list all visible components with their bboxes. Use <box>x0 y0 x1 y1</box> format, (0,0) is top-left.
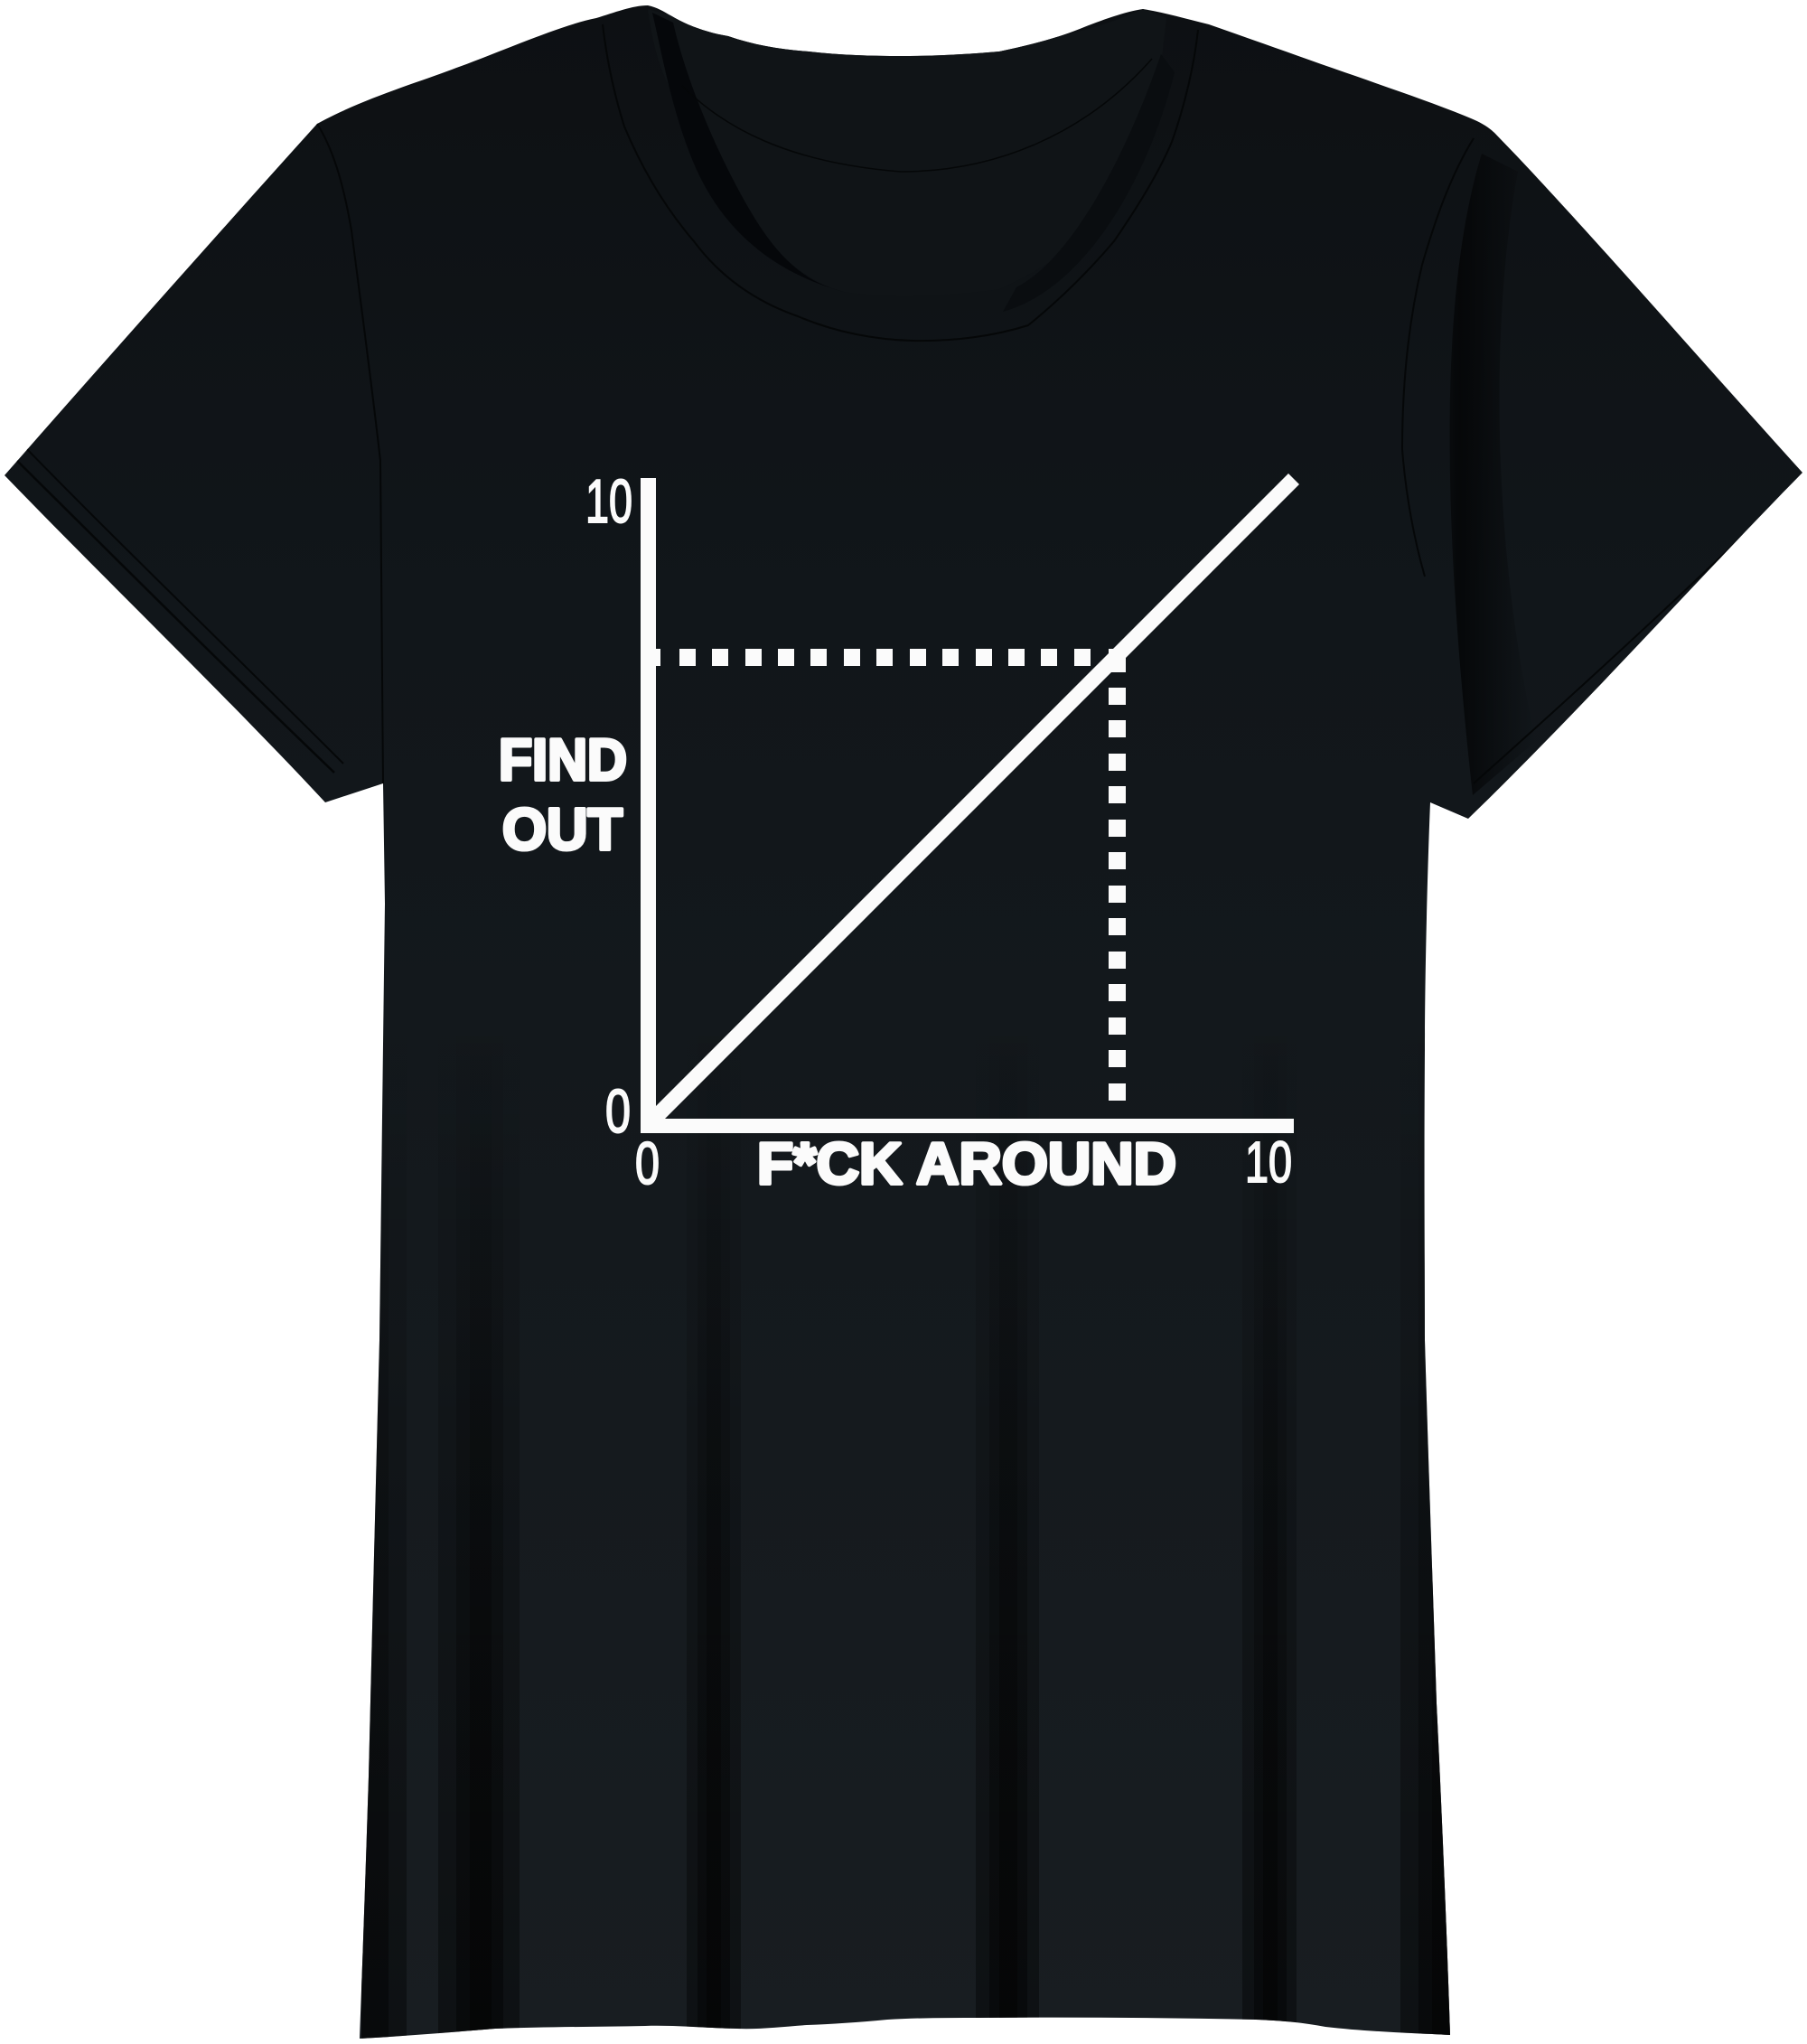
diagonal line <box>651 479 1294 1122</box>
vertical dotted guide <box>1109 688 1126 1101</box>
neck shadow <box>652 13 828 287</box>
inner back neck <box>669 9 1144 56</box>
y axis max label: 10 <box>585 467 632 536</box>
chart: find out vs f*ck around <box>499 467 1294 1196</box>
x axis title: F*CK AROUND <box>757 1130 1176 1196</box>
fabric folds near hem <box>361 994 1464 2044</box>
x axis <box>641 1119 1294 1133</box>
shadow on right sleeve <box>1449 154 1500 795</box>
horizontal dotted guide <box>656 649 1126 672</box>
y axis title <box>499 727 627 862</box>
y axis zero label: 0 <box>605 1077 631 1146</box>
y axis title: FIND <box>499 727 627 792</box>
y axis <box>641 478 656 1133</box>
x axis zero label: 0 <box>635 1130 660 1196</box>
x axis max label: 10 <box>1245 1130 1292 1195</box>
y axis title: OUT <box>502 796 623 862</box>
